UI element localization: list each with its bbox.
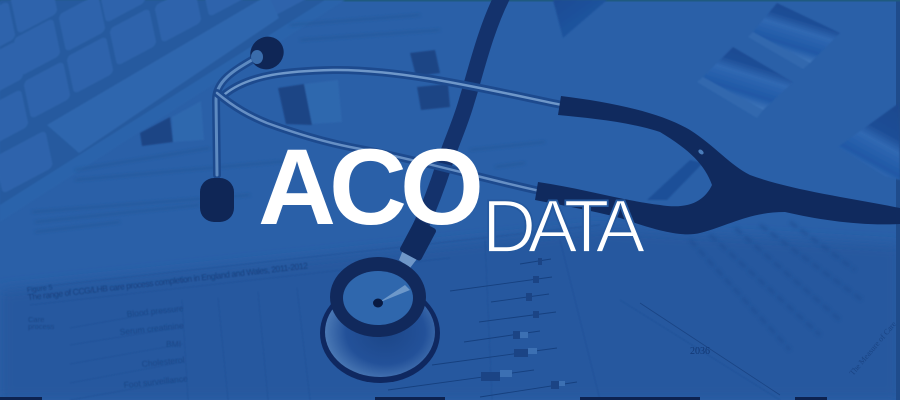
metal binaurals xyxy=(216,57,257,175)
document: table figure xyxy=(27,225,780,400)
document: lower right page xyxy=(640,222,898,395)
bottom edge strip xyxy=(0,397,827,400)
document: table figure: Serum creatinine xyxy=(119,320,184,337)
title: DATA: DATA xyxy=(482,184,645,268)
document: right page with charts xyxy=(553,0,900,200)
document: table figure: BMI xyxy=(166,339,181,349)
stethoscope ear tips xyxy=(200,30,290,222)
document: body text lines xyxy=(32,15,545,232)
title: ACO: ACO xyxy=(258,126,480,247)
stethoscope chest piece xyxy=(320,218,440,383)
keyboard space bar xyxy=(47,0,279,153)
document: table figure: Cholesterol xyxy=(141,355,185,369)
document: table figure: Foot surveillance xyxy=(123,373,188,390)
document: left chart bars xyxy=(140,50,450,146)
title xyxy=(258,126,645,268)
chart: box plot whiskers xyxy=(388,258,577,397)
document: table figure: process xyxy=(28,322,55,331)
main vertical dark tube xyxy=(420,0,503,228)
keyboard xyxy=(0,0,345,222)
document: lower right page: The Measure of Care xyxy=(848,319,898,377)
document: lower right page: 2036 xyxy=(690,346,710,357)
stethoscope tubing xyxy=(216,0,562,228)
document: table figure: Figure 5 xyxy=(27,284,53,294)
stethoscope: dark rubber Y tube xyxy=(535,96,900,234)
document: table figure: Care xyxy=(28,315,44,324)
document: table figure: The range of CCG/LHB care process completion in England and Wales, 2011-2012 xyxy=(27,260,309,302)
document: table figure: Blood pressure xyxy=(126,303,184,319)
